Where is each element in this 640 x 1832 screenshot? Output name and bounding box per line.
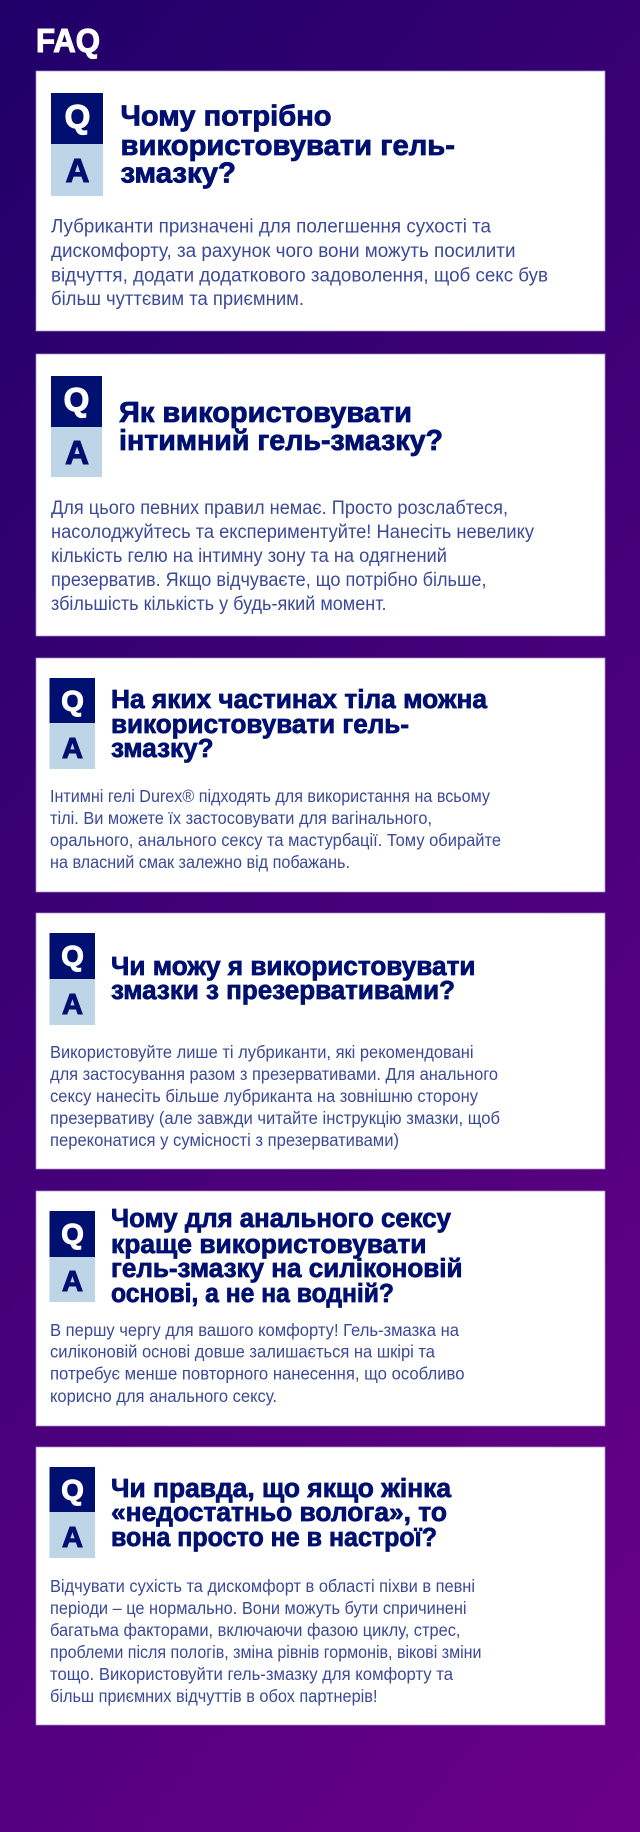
answer text <box>51 498 534 615</box>
Q and A badge: A <box>62 1266 83 1298</box>
card background <box>36 1191 605 1426</box>
answer text: корисно для анального сексу. <box>50 1386 277 1406</box>
answer text: періоди – це нормально. Вони можуть бути спричинені <box>50 1598 466 1618</box>
answer text <box>50 786 501 872</box>
answer text: на власний смак залежно від побажань. <box>50 852 350 872</box>
answer text: дискомфорту, за рахунок чого вони можуть посилити <box>51 241 516 262</box>
panel: body parts <box>36 658 605 892</box>
answer text: переконатися у сумісності з презервативами) <box>50 1130 399 1150</box>
question heading: змазку? <box>111 735 214 763</box>
question heading: змазки з презервативами? <box>111 977 455 1005</box>
card background <box>36 658 605 892</box>
answer text: Використовуйте лише ті лубриканти, які рекомендовані <box>50 1042 474 1062</box>
answer text: Інтимні гелі Durex® підходять для використання на всьому <box>50 786 490 806</box>
title: FAQ <box>36 22 100 59</box>
Q and A badge: Q <box>61 1475 84 1507</box>
answer text: тілі. Ви можете їх застосовувати для вагінального, <box>50 808 432 828</box>
Q and A badge: A <box>62 733 83 765</box>
answer text: Відчувати сухість та дискомфорт в області піхви в певні <box>50 1576 475 1596</box>
card background <box>36 1447 605 1725</box>
answer text <box>51 217 548 310</box>
question heading <box>111 1205 462 1308</box>
Q and A badge <box>50 1467 95 1558</box>
question heading: краще використовувати <box>111 1231 426 1259</box>
answer text: більш приємних відчуттів в обох партнерів! <box>50 1686 378 1706</box>
question heading: змазку? <box>120 158 236 190</box>
Q and A badge <box>51 93 103 196</box>
answer text: Лубриканти призначені для полегшення сухості та <box>51 217 491 238</box>
Q and A badge: Q <box>61 941 84 973</box>
question heading <box>111 1475 452 1552</box>
question heading: основі, а не на водній? <box>111 1280 394 1308</box>
answer text: відчуття, додати додаткового задоволення, щоб секс був <box>51 266 548 286</box>
question heading: Як використовувати <box>119 397 412 429</box>
answer text: Для цього певних правил немає. Просто розслабтеся, <box>51 498 508 519</box>
answer text: багатьма факторами, включаючи фазою циклу, стрес, <box>50 1620 460 1640</box>
Q and A badge: A <box>62 989 83 1021</box>
question heading: Чи правда, що якщо жінка <box>111 1475 452 1503</box>
question heading: використовувати гель- <box>120 130 455 162</box>
card background <box>36 913 605 1169</box>
card background <box>36 71 605 331</box>
question heading: Чому для анального сексу <box>111 1205 452 1233</box>
Q and A badge: A <box>66 152 89 189</box>
Q and A badge <box>50 1211 95 1302</box>
answer text: більш чуттєвим та приємним. <box>51 289 304 310</box>
question heading: інтимний гель-змазку? <box>119 425 443 457</box>
Q and A badge <box>50 678 95 769</box>
answer text: насолоджуйтесь та експериментуйте! Нанесіть невелику <box>51 522 534 543</box>
question heading: Чи можу я використовувати <box>111 953 476 981</box>
answer text: потребує менше повторного нанесення, що особливо <box>50 1364 464 1384</box>
answer text: сексу нанесіть більше лубриканта на зовнішню сторону <box>50 1086 478 1106</box>
panel: anal sex gel <box>36 1191 605 1426</box>
answer text: для застосування разом з презервативами. Для анального <box>50 1064 498 1084</box>
Q and A badge: Q <box>65 98 90 135</box>
question heading: вона просто не в настрої? <box>111 1524 437 1552</box>
answer text <box>50 1320 464 1406</box>
question heading: На яких частинах тіла можна <box>111 686 488 714</box>
question heading: гель-змазку на силіконовій <box>111 1255 462 1283</box>
question heading: «недостатньо волога», то <box>111 1499 447 1527</box>
panel: condoms <box>36 913 605 1169</box>
Q and A badge: Q <box>61 686 84 718</box>
answer text: презервативу (але завжди читайте інструкцію змазки, щоб <box>50 1108 500 1128</box>
Q and A badge: A <box>62 1522 83 1554</box>
panel: why use gel <box>36 71 605 331</box>
Q and A badge <box>51 376 102 477</box>
question heading: Чому потрібно <box>120 100 332 132</box>
question heading <box>111 686 488 763</box>
panel: how to use gel <box>36 354 605 636</box>
question heading: використовувати гель- <box>111 711 409 739</box>
answer text: тощо. Використовуйти гель-змазку для комфорту та <box>50 1664 453 1684</box>
question heading <box>111 953 476 1005</box>
Q and A badge: Q <box>61 1219 84 1251</box>
question heading <box>119 397 443 457</box>
Q and A badge <box>50 933 95 1025</box>
answer text <box>50 1042 500 1150</box>
answer text: орального, анального сексу та мастурбації. Тому обирайте <box>50 830 501 850</box>
answer text: В першу чергу для вашого комфорту! Гель-змазка на <box>50 1320 459 1340</box>
Q and A badge: Q <box>64 381 89 418</box>
answer text: презерватив. Якщо відчуваєте, що потрібно більше, <box>51 570 486 591</box>
question heading <box>120 100 455 190</box>
card background <box>36 354 605 636</box>
Q and A badge: A <box>65 434 89 471</box>
panel: not in the mood <box>36 1447 605 1725</box>
answer text: кількість гелю на інтимну зону та на одягнений <box>51 546 447 567</box>
answer text: силіконовій основі довше залишається на шкірі та <box>50 1342 435 1362</box>
answer text <box>50 1576 482 1706</box>
answer text: проблеми після пологів, зміна рівнів гормонів, вікові зміни <box>50 1642 482 1662</box>
answer text: збільшість кількість у будь-який момент. <box>51 594 386 615</box>
